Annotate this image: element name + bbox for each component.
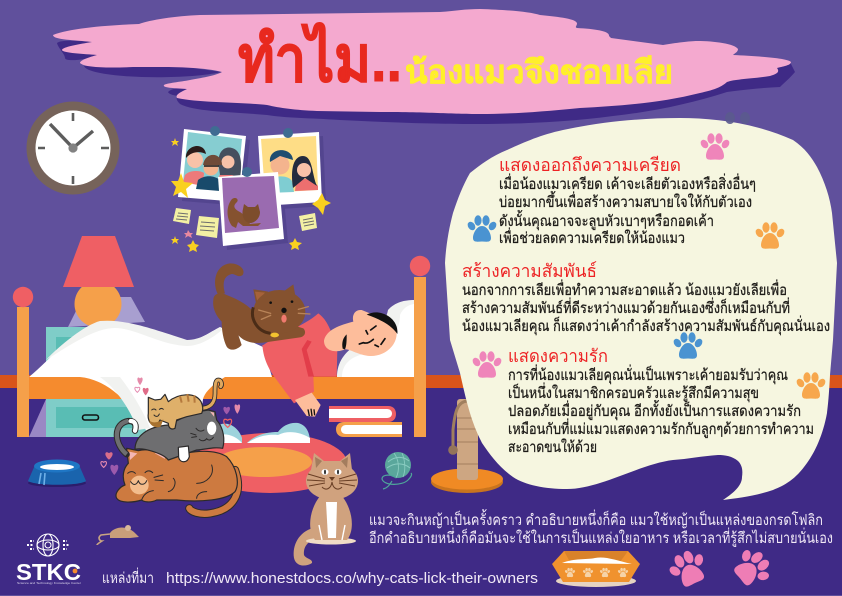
body: stress: เมื่อน้องแมวเครียด เค้าจะเลียตัวเองหรือสิ่งอื่นๆ xyxy=(499,173,756,193)
title: red: ทำไม.. xyxy=(238,22,402,95)
title: yellow: น้องแมวจึงชอบเลีย xyxy=(405,54,673,90)
text block: love xyxy=(508,346,814,456)
body: stress: ดังนั้นคุณอาจจะลูบหัวเบาๆหรือกอดเค้า xyxy=(499,210,714,231)
bedside lamp xyxy=(63,236,145,328)
cat bed and slippers xyxy=(193,423,347,493)
stack of books xyxy=(329,406,402,437)
blanket xyxy=(29,321,272,432)
man: shirt and arm xyxy=(262,313,337,403)
grey cat xyxy=(117,405,224,462)
pillow xyxy=(337,300,414,377)
logo tagline: Science and Technology Knowledge Center xyxy=(17,581,81,585)
orange cat xyxy=(116,446,238,514)
bedside table xyxy=(29,327,146,437)
logo emblem xyxy=(27,534,70,556)
body: stress: เพื่อช่วยลดความเครียดให้น้องแมว xyxy=(499,227,685,247)
milk bowl xyxy=(28,460,86,487)
floor xyxy=(0,388,842,595)
body: stress xyxy=(499,173,756,247)
text block: bonding xyxy=(462,261,830,336)
mouse xyxy=(97,525,139,545)
tabby kitten xyxy=(148,380,222,429)
body: love: เป็นหนึ่งในสมาชิกครอบครัวและรู้สึกมีความสุข xyxy=(508,382,759,403)
heading: love: แสดงความรัก xyxy=(508,346,608,366)
sitting cat xyxy=(294,453,358,566)
source line xyxy=(102,567,538,587)
heading: bonding: สร้างความสัมพันธ์ xyxy=(462,261,597,281)
photo: couple xyxy=(258,132,322,206)
body: love: การที่น้องแมวเลียคุณนั่นเป็นเพราะเค้ายอมรับว่าคุณ xyxy=(508,364,788,385)
photo: cat xyxy=(218,172,284,246)
photo shadows xyxy=(182,133,326,250)
bottom edge line xyxy=(0,595,842,596)
body: bonding xyxy=(462,279,830,336)
photo: family of three xyxy=(178,129,246,202)
source line: แหล่งที่มา xyxy=(102,567,154,587)
stars xyxy=(171,138,331,252)
body: love xyxy=(508,364,814,456)
paw prints in bubble xyxy=(466,133,827,399)
footnote text xyxy=(369,509,833,547)
body: stress: บ่อยมากขึ้นเพื่อสร้างความสบายใจให้กับตัวเอง xyxy=(499,191,752,211)
text block: stress xyxy=(499,155,756,247)
paw shadow above bubble xyxy=(725,112,750,124)
pins xyxy=(210,126,293,177)
logo: STKC xyxy=(16,534,81,585)
yarn ball xyxy=(382,452,412,489)
body: love: สะอาดขนให้ด้วย xyxy=(508,438,597,456)
cat pile xyxy=(101,378,240,514)
icon: wall clock xyxy=(26,102,120,194)
litter box xyxy=(552,551,640,587)
photo collage xyxy=(171,126,331,252)
heading: stress: แสดงออกถึงความเครียด xyxy=(499,155,681,175)
bed frame xyxy=(13,256,430,437)
skirting stripe xyxy=(0,375,842,389)
man: hand xyxy=(295,393,321,417)
man: head xyxy=(324,310,397,356)
cat on bed xyxy=(213,263,310,350)
sticky notes xyxy=(173,208,317,238)
speech bubble xyxy=(445,118,837,500)
body: bonding: นอกจากการเลียเพื่อทำความสะอาดแล้ว น้องแมวยังเลียเพื่อ xyxy=(462,279,787,299)
body: bonding: สร้างความสัมพันธ์ที่ดีระหว่างแมวด้วยกันเองซึ่งก็เหมือนกับที่ xyxy=(462,297,790,317)
background wall xyxy=(0,0,842,376)
logo wordmark: STKC xyxy=(16,559,81,585)
sleeping man xyxy=(262,310,397,417)
hearts xyxy=(101,378,240,475)
body: love: ปลอดภัยเมื่ออยู่กับคุณ อีกทั้งยังเป็นการแสดงความรัก xyxy=(508,400,801,421)
title banner xyxy=(53,9,795,124)
pink paw prints on floor xyxy=(663,542,778,594)
scratching post xyxy=(431,399,503,493)
source line: https://www.honestdocs.co/why-cats-lick-their-owners xyxy=(166,570,538,587)
